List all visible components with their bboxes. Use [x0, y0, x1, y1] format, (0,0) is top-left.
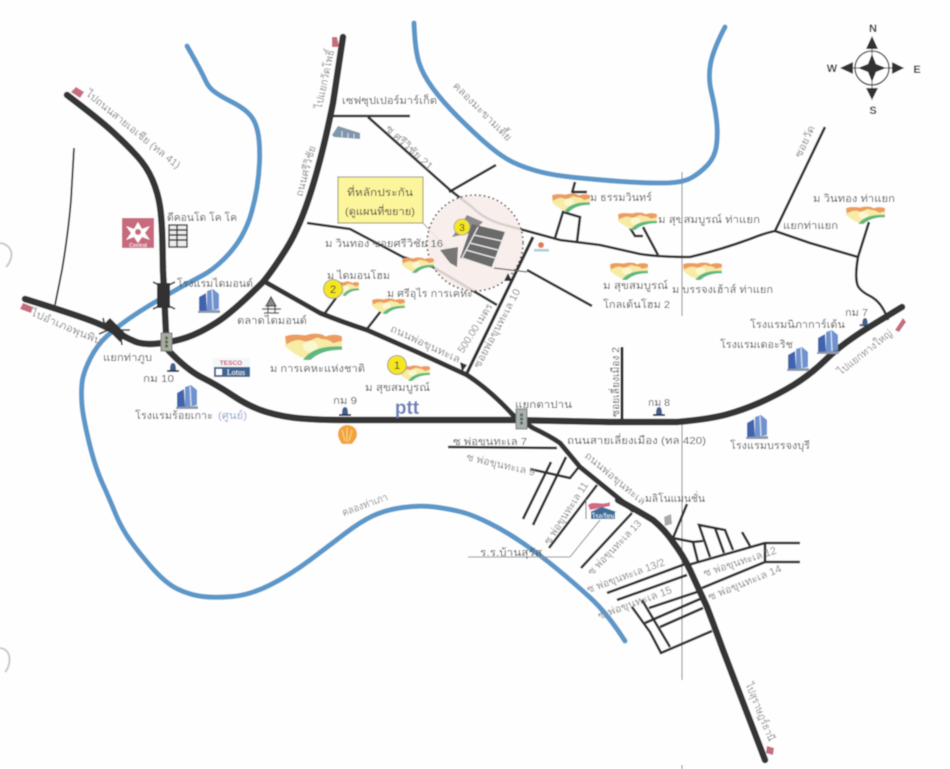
distance arrow [460, 362, 467, 372]
place labels: ซ พ่อขุนทะเล 13/2 [585, 556, 667, 596]
place labels: ซอยเลี่ยงเมือง 2 [608, 347, 622, 417]
place labels: ม ธรรมวินทร์ [590, 191, 652, 204]
numbered marker 1: 1 [394, 360, 400, 372]
Phokhun Thale road [267, 283, 633, 510]
place labels: ซอยวัด [793, 124, 818, 160]
place labels: ซ ศรีวิชัย 21 [383, 122, 436, 173]
place labels: ซ พ่อขุนทะเล 15 [596, 584, 674, 622]
place labels: โรงแรมนิภาการ์เด้น [750, 318, 845, 331]
numbered marker 2: 2 [330, 284, 336, 296]
traffic light: west [161, 333, 172, 351]
numbered marker 1 [388, 356, 406, 374]
highway to Asia road [67, 95, 166, 333]
site circle with plan [427, 195, 527, 291]
vertical grid line [681, 172, 683, 769]
place labels: ไปถนนสายเอเชีย (ทล 41) [82, 86, 183, 171]
place labels: ม ไดมอนโฮม [327, 269, 390, 282]
place labels: ซ พ่อขุนทะเล 14 [706, 563, 783, 603]
supermarket icon [332, 126, 360, 139]
place labels: (ศูนย์) [218, 409, 247, 422]
place labels: ซอยพ่อขุนทะเล 10 [471, 287, 523, 370]
hotel icons [176, 289, 839, 439]
place labels: คลองท่าเภา [340, 491, 390, 519]
place labels: ซ พ่อขุนทะเล 9 [465, 451, 536, 479]
place labels: โรงแรมร้อยเกาะ [135, 409, 213, 422]
place labels: กม 8 [648, 397, 670, 409]
village icons [285, 193, 885, 381]
km marker icons [167, 318, 870, 416]
place labels: ม วินทอง ท่าแยก [813, 193, 895, 205]
place labels: ถนนพ่อขุนทะเล [388, 323, 462, 366]
place labels: แยกท่าแยก [783, 220, 838, 232]
place labels: คลองมะขามเตี้ย [450, 79, 515, 144]
callout: collateral site: ที่หลักประกัน [347, 185, 413, 199]
numbered marker 3: 3 [459, 223, 465, 234]
place labels: มลิโนแมนชั่น [645, 491, 705, 505]
compass: E [913, 64, 921, 76]
Tesco Lotus logo: TESCO [220, 360, 242, 367]
place labels: ม ศรีอุไร การเคหะ [387, 287, 473, 300]
place labels: ถนนสายเลี่ยงเมือง (ทล 420) [567, 433, 706, 447]
compass: W [827, 63, 838, 75]
place labels: ม การเคหะแห่งชาติ [270, 363, 365, 375]
bridge marker 2 [99, 318, 130, 345]
place labels: 500.00 เมตร [456, 301, 496, 355]
bypass road 420 [168, 307, 902, 422]
Tesco Lotus logo: Lotus [227, 368, 245, 377]
place labels: ไปแยกวัดโพธิ์ [310, 47, 337, 111]
river: left canal [82, 46, 625, 641]
place labels: ถนนศรีวิชัย [293, 144, 319, 198]
place labels: ม สุขสมบูรณ์ [365, 381, 430, 394]
PTT logo: ptt [395, 398, 420, 419]
school icon: โรงเรียน [592, 512, 614, 520]
place labels: ดีคอนโด โค โค [167, 211, 237, 224]
place labels: ถนนพ่อขุนทะเล [582, 450, 648, 508]
callout: collateral site: (ดูแผนที่ขยาย) [345, 204, 415, 218]
place labels: ร.ร.บ้านสุรัส [480, 547, 543, 559]
punch hole marks [0, 243, 11, 672]
market icon [262, 297, 281, 313]
Central logo [122, 218, 154, 249]
place labels: แยกตาปาน [515, 399, 572, 411]
place labels: กม 7 [845, 307, 868, 319]
place labels: โรงแรมเดอะริช [720, 338, 793, 351]
place labels: ซ พ่อขุนทะเล 13 [586, 518, 644, 578]
grey leader line [468, 520, 600, 557]
numbered marker 2 [324, 280, 342, 298]
place labels: ซ พ่อขุนทะเล 7 [453, 436, 527, 448]
place labels: ไปสุราษฎร์ธานี [742, 680, 778, 743]
compass: N [869, 23, 877, 35]
place labels: ซ พ่อขุนทะเล 12 [702, 545, 778, 580]
Shell logo [338, 425, 357, 444]
place labels: ไปแยกทางใหญ่ [834, 327, 895, 378]
condo building icon [169, 225, 187, 247]
apartment icon [664, 514, 672, 526]
traffic light: Ta Pan [516, 409, 527, 429]
Central logo: Central [129, 243, 147, 249]
Tesco Lotus logo [213, 358, 250, 377]
place labels: แยกท่าภูบ [103, 352, 152, 364]
minor road network [55, 116, 888, 653]
callout leader [423, 223, 452, 254]
place labels: ม วินทอง ซอยศรีวิชัย 16 [325, 237, 443, 250]
small landmark icon [534, 242, 549, 252]
place labels: ซ พ่อขุนทะเล 11 [542, 480, 591, 547]
place labels: ไปอำเภอพุนพิน [28, 306, 104, 348]
place labels: ม สุขสมบูรณ์ [603, 279, 668, 292]
place labels: ตลาดไดมอนด์ [237, 314, 307, 327]
place labels: เซฟซุปเปอร์มาร์เก็ต [342, 93, 437, 107]
school icon [586, 499, 617, 520]
compass: S [869, 105, 877, 117]
place labels: กม 10 [143, 373, 174, 385]
place labels: ม สุขสมบูรณ์ ท่าแยก [658, 213, 760, 226]
highway south [618, 500, 765, 760]
compass [827, 23, 921, 117]
bridge marker [153, 282, 175, 309]
highway north-west [25, 37, 343, 344]
place labels: ม บรรจงเฮ้าส์ ท่าแยก [672, 283, 773, 296]
place labels: โกลเด้นโฮม 2 [603, 298, 670, 311]
place labels: โรงแรมไดมอนด์ [177, 277, 253, 290]
numbered marker 3 [454, 219, 470, 235]
place labels: โรงแรมบรรจงบุรี [730, 439, 810, 452]
callout: collateral site [338, 177, 423, 223]
place labels: กม 9 [333, 395, 357, 407]
river: upper canal [414, 23, 725, 183]
